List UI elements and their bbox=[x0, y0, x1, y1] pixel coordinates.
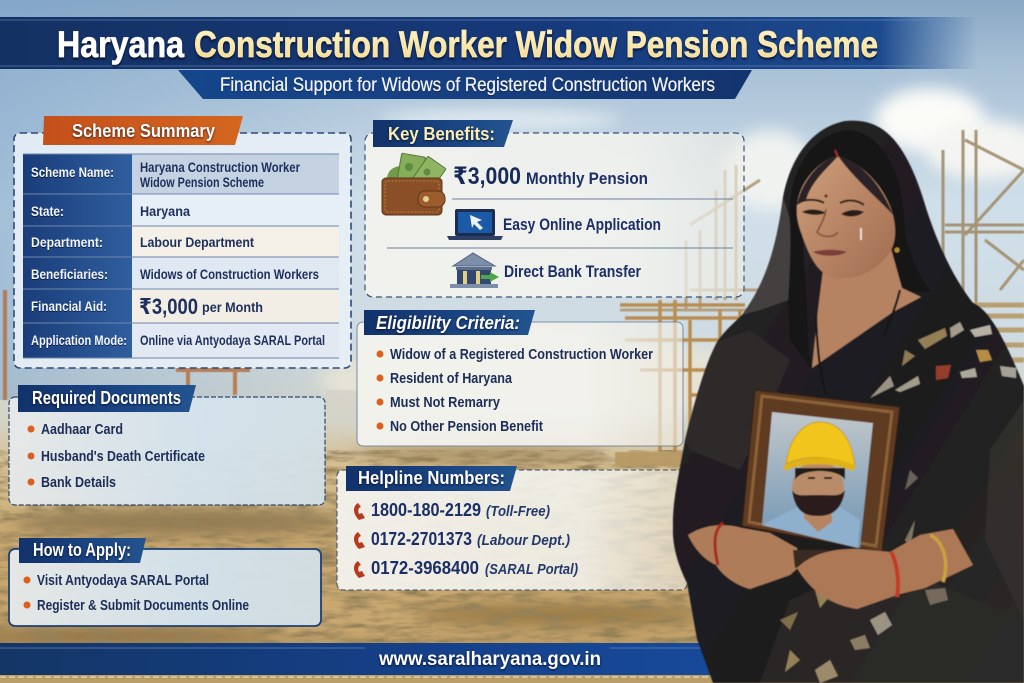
heading tab: helpline numbers: Helpline Numbers: bbox=[358, 467, 505, 488]
table: scheme details: Online via Antyodaya SARAL Portal bbox=[140, 333, 325, 348]
benefit: easy online application: Easy Online Application bbox=[503, 215, 661, 234]
subtitle ribbon bbox=[178, 70, 752, 99]
heading tab: scheme summary bbox=[43, 116, 243, 145]
hands holding frame bbox=[688, 523, 973, 609]
list: documents: Bank Details bbox=[41, 475, 116, 491]
neck and chest bbox=[812, 245, 921, 368]
table: scheme details: State: bbox=[31, 204, 64, 219]
helpline: saral portal: 0172-3968400 bbox=[371, 558, 479, 578]
title banner bbox=[0, 17, 978, 69]
icon: laptop with cursor bbox=[447, 209, 503, 240]
benefit: monthly pension: ₹3,000 bbox=[453, 163, 521, 190]
helpline: saral portal: (SARAL Portal) bbox=[485, 561, 578, 578]
distant cranes and buildings, left bbox=[5, 290, 357, 422]
hair bbox=[789, 130, 932, 370]
table: scheme details: Department: bbox=[31, 235, 103, 250]
list: application steps bbox=[24, 573, 249, 614]
panel: how to apply bbox=[9, 538, 321, 626]
title text: Construction Worker Widow Pension Scheme bbox=[194, 24, 878, 65]
list: documents bbox=[28, 422, 205, 491]
panel: eligibility criteria bbox=[357, 310, 683, 446]
list: application steps: Visit Antyodaya SARAL Portal bbox=[37, 573, 209, 589]
table: scheme details: Beneficiaries: bbox=[31, 267, 108, 282]
helpline: saral portal bbox=[354, 558, 578, 578]
illustration: grieving widow holding a framed photo bbox=[673, 121, 1024, 683]
table: scheme details: Labour Department bbox=[140, 235, 254, 250]
panel: helpline numbers bbox=[337, 466, 687, 590]
table: scheme details: Haryana bbox=[140, 204, 190, 219]
heading tab: required documents bbox=[18, 385, 196, 412]
face bbox=[797, 150, 900, 278]
saree and veil bbox=[673, 121, 1024, 683]
list: eligibility items: Must Not Remarry bbox=[390, 395, 500, 411]
list: documents: Aadhaar Card bbox=[41, 422, 123, 438]
benefit: monthly pension: Monthly Pension bbox=[526, 169, 648, 188]
photo frame bbox=[742, 390, 900, 552]
table: scheme details: per Month bbox=[202, 300, 263, 315]
benefit: direct bank transfer: Direct Bank Transfer bbox=[504, 262, 641, 281]
helpline: toll-free bbox=[354, 500, 550, 520]
list: eligibility items: Widow of a Registered Construction Worker bbox=[390, 347, 653, 363]
heading tab: how to apply: How to Apply: bbox=[33, 539, 131, 560]
title text: Haryana bbox=[57, 24, 184, 65]
heading tab: eligibility criteria: Eligibility Criteria: bbox=[376, 312, 520, 333]
helpline: labour department: (Labour Dept.) bbox=[477, 532, 570, 549]
icon: bank with transfer arrow bbox=[450, 253, 499, 288]
helpline: labour department: 0172-2701373 bbox=[371, 529, 472, 549]
icon: wallet with banknotes bbox=[382, 153, 446, 215]
saree print patches bbox=[780, 322, 1016, 683]
list: eligibility items: Resident of Haryana bbox=[390, 371, 513, 387]
panel: scheme summary bbox=[14, 116, 351, 368]
list: application steps: Register & Submit Documents Online bbox=[37, 598, 249, 614]
table: scheme details: Application Mode: bbox=[31, 333, 127, 348]
sand texture bbox=[0, 450, 720, 683]
footer bar with website: www.saralharyana.gov.in bbox=[378, 649, 601, 670]
necklace bbox=[816, 290, 900, 395]
panel: key benefits bbox=[365, 120, 744, 297]
heading tab: key benefits: Key Benefits: bbox=[388, 123, 495, 144]
table: scheme details: ₹3,000 bbox=[139, 294, 198, 319]
list: eligibility items: No Other Pension Benefit bbox=[390, 419, 543, 435]
heading tab: required documents: Required Documents bbox=[32, 387, 181, 408]
table: scheme details: Scheme Name: bbox=[31, 165, 114, 180]
benefit: monthly pension bbox=[453, 163, 648, 190]
panel: required documents bbox=[9, 385, 325, 505]
table: scheme details bbox=[23, 154, 339, 358]
helpline: toll-free: 1800-180-2129 bbox=[371, 500, 481, 520]
helpline: toll-free: (Toll-Free) bbox=[486, 503, 550, 520]
distant scaffolding, right bbox=[615, 130, 1024, 466]
heading tab: key benefits bbox=[373, 120, 513, 147]
list: documents: Husband's Death Certificate bbox=[41, 449, 205, 465]
table: scheme details: Widows of Construction Workers bbox=[140, 267, 319, 282]
framed photo of worker bbox=[762, 412, 873, 548]
table: scheme details: Widow Pension Scheme bbox=[140, 175, 264, 190]
helpline: labour department bbox=[354, 529, 570, 549]
heading tab: scheme summary: Scheme Summary bbox=[72, 120, 216, 141]
heading tab: how to apply bbox=[19, 538, 146, 563]
table: scheme details: Financial Aid: bbox=[31, 299, 107, 314]
subtitle ribbon: Financial Support for Widows of Registered Construction Workers bbox=[220, 75, 715, 96]
table: scheme details: Haryana Construction Worker bbox=[140, 160, 301, 175]
list: eligibility items bbox=[376, 347, 653, 435]
footer bar with website bbox=[0, 643, 720, 677]
